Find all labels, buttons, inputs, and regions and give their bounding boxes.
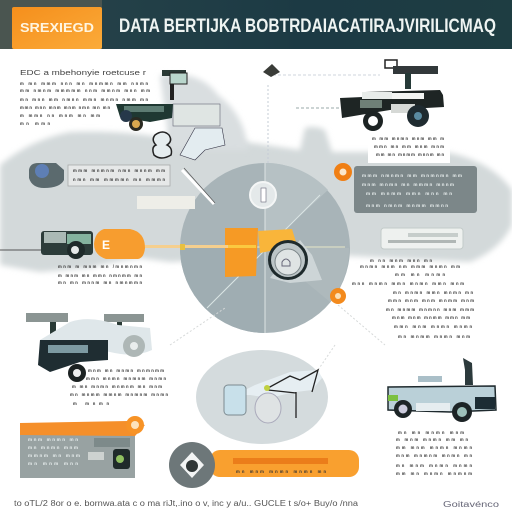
- dashed connectors lower: [170, 305, 385, 370]
- hub top gauge icon: [250, 182, 276, 208]
- text block: lower right: mm mnm mnmn mnmn: [396, 445, 472, 450]
- text block: top left: EDC a mbehonyie roetcuse r: [20, 68, 147, 77]
- vehicle: lower left: [26, 313, 152, 382]
- text block: lower right: mm mn mnmn mnmnm: [396, 471, 472, 476]
- footer text: left: to oTL/2 8or o e. bornwa.ata c o ma riJt,.ino o v, inc y a/u.. GUCLE t s/o+ Buy/o /nna: [14, 499, 359, 508]
- text block: left middle: m mnm mn mmn nmnmm mn: [58, 273, 142, 278]
- text block: lower left: [70, 368, 168, 406]
- text block: right middle: mnn mnmn mmn mnmn mmn mnm: [352, 281, 464, 286]
- background gray blob: [0, 113, 512, 272]
- connector: dashed to top-right vehicle: [268, 74, 380, 76]
- central gear wheel: [268, 240, 322, 283]
- panel: right dark card: mnm mnmn mn mmmn mnnm: [362, 182, 454, 187]
- text block: under top right vehicle: m mm mnmn mnm mm m: [372, 136, 444, 141]
- text block: right middle: mm mn mnmn: [395, 272, 445, 277]
- text block: top left: [20, 68, 150, 126]
- text block: lower left: mn mnmm mmnm mnmnm mnmn: [70, 392, 168, 397]
- text block: under top right vehicle: mm mn mnmm mnnm mn: [376, 152, 444, 157]
- panel: right dark card: mmm nmnmn mm mnmnmn mm: [362, 173, 462, 178]
- panel: bottom center orange bar: mn mnm mnmn mnmn mn: [236, 469, 326, 474]
- text block: right middle: mn mnmn mmn mnmn mn: [393, 290, 473, 295]
- text block: right middle: mn mnmm mnmn mnm: [398, 334, 470, 339]
- text block: left middle: mnm m mnm mn /mnmnmn: [58, 264, 142, 269]
- light label bar: [137, 196, 195, 209]
- text block: lower right: m mnm mnmn mm mn: [396, 437, 468, 442]
- panel: right dark card: mm mnmm mmn mnn mn: [366, 191, 452, 196]
- lower ellipse diagram: [196, 350, 328, 444]
- vehicle: left middle: [0, 231, 93, 259]
- callout: left pill: nmn mm mmmmn mn mmmn: [73, 177, 165, 182]
- panel: bottom left gray card: mn mnm mnn: [28, 461, 78, 466]
- text block: left middle: [58, 264, 142, 285]
- text block: lower left: mmn mnmn mnmnm mnmn: [86, 376, 166, 381]
- connector: dashed middle: [296, 107, 340, 109]
- panel: bottom left gray card: mn mnmn mnm: [28, 445, 78, 450]
- panel: bottom left gray card: mnm mnmn mn: [28, 437, 78, 442]
- callout: left pill: [29, 163, 170, 188]
- text block: right middle: m nn mnm mnn mn: [370, 258, 432, 263]
- logo badge: [12, 7, 102, 49]
- callout: left pill: mmm mnmnm nmn mnnm mm: [73, 168, 165, 173]
- header band: [0, 0, 512, 49]
- panel: bottom center orange bar: [169, 442, 359, 488]
- text block: right middle: mn mnmm mnmnn mnm mmm: [386, 307, 474, 312]
- panel: right dark card: [354, 166, 477, 213]
- text block: lower right: mn mnm mnmn mnmn: [396, 463, 472, 468]
- text block: right middle: mmn mnm mnm mnmm mnm: [388, 298, 474, 303]
- text block: lower right: [396, 430, 472, 476]
- node dot: [180, 244, 185, 250]
- text block: top left: m mmn nn mnm mn mm: [20, 113, 100, 118]
- text block: right middle: mnmn mnm nm mmm mnmn mm: [360, 264, 460, 269]
- text block: lower right: mnm mnmnm mnmn mn: [396, 453, 472, 458]
- panel: bottom left gray card: mmnm mn mnm: [28, 453, 80, 458]
- orange pin: lower hub: [330, 288, 346, 304]
- connector: dashed vertical top: [267, 85, 269, 165]
- footer text: right: Goitavénco: [443, 500, 500, 509]
- text block: top left: mn mmn: [20, 121, 50, 126]
- panel: bottom left gray card: [20, 416, 145, 478]
- text block: right middle: [352, 258, 474, 339]
- text block: right middle: mmn mnm mnmn mnmn: [394, 324, 472, 329]
- orange tag: [94, 229, 145, 259]
- text block: under top right vehicle: [368, 134, 450, 163]
- text block: lower right: mn mn mnmn mnm: [398, 430, 464, 435]
- icon: drone: [263, 64, 280, 77]
- orange central block: [225, 228, 296, 277]
- text block: lower left: m mn mnmn mnmnm mn mnm: [72, 384, 162, 389]
- orange pin: right top: [334, 163, 352, 181]
- panel: right dark card: mnm nmnm mnmm mmnn: [366, 203, 448, 208]
- text block: top left: mn mnn mm nmnn mmn mnmn nmm mn: [20, 97, 148, 102]
- central circular hub: [180, 163, 350, 333]
- text block: top left: mmn mnn mnm mnm nmn mn mn: [20, 105, 110, 110]
- text block: left middle: mn mn mnnm mn nmnmmn: [58, 280, 142, 285]
- connector: left orange pipe: [143, 245, 228, 248]
- text block: top left: mm nmnm mmmmm nnm mmnm mnn mm: [20, 88, 150, 93]
- text block: under top right vehicle: mmn mn mm mnm mnm: [374, 144, 444, 149]
- orange tag: E: [102, 238, 110, 252]
- text block: lower left: mnm mn mnmn mnmnmm: [88, 368, 164, 373]
- callout: right light box: [381, 228, 463, 249]
- text block: right middle: mnm mnm mnmm mmn mm: [392, 315, 470, 320]
- vehicle: top right: [340, 60, 444, 131]
- logo badge: SREXIEGD: [20, 20, 94, 35]
- text block: lower left: m mnmn: [73, 401, 109, 406]
- connector: white pipe from callout: [182, 170, 214, 204]
- vehicle: lower right: [388, 358, 496, 422]
- text block: top left: m mn mmm nnn mn mnmmn mm nnmn: [20, 81, 148, 86]
- gray shape behind top-left vehicle: [160, 74, 248, 150]
- vehicle: top left: [116, 70, 225, 160]
